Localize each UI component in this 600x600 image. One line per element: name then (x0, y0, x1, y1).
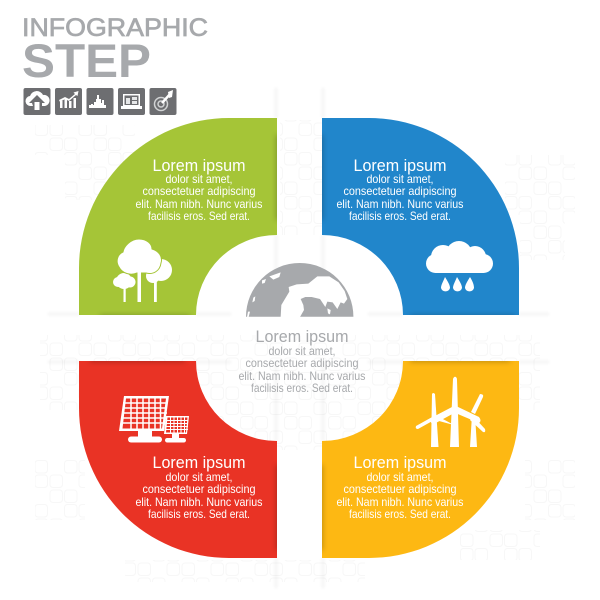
text: blue body: consectetuer adipiscing (344, 184, 456, 198)
panel: yellow quadrant (319, 358, 519, 558)
icon: solar panels (119, 396, 189, 442)
text: yellow body: consectetuer adipiscing (344, 482, 456, 496)
text: red body (136, 470, 262, 521)
icon: globe (246, 263, 353, 317)
panel: green quadrant (79, 118, 280, 319)
title: STEP (22, 34, 151, 87)
text: green body (136, 172, 262, 223)
icon: rain cloud (426, 241, 493, 291)
text: center body: consectetuer adipiscing (246, 356, 358, 370)
band shadows (48, 88, 549, 588)
icon: trees (113, 239, 172, 302)
panel: blue quadrant (319, 118, 519, 319)
text: red body: dolor sit amet, (166, 470, 232, 484)
heading: blue: Lorem ipsum (354, 156, 446, 175)
icon: cloud upload (24, 88, 50, 115)
text: blue body: dolor sit amet, (366, 172, 434, 186)
text: center body: facilisis eros. Sed erat. (251, 381, 353, 395)
text: center body: elit. Nam nibh. Nunc varius (238, 369, 366, 383)
text: blue body: facilisis eros. Sed erat. (349, 209, 451, 223)
icon: wind turbines (416, 377, 485, 447)
icon: growth chart (55, 88, 82, 115)
text: center body: dolor sit amet, (268, 344, 336, 358)
heading: red: Lorem ipsum (152, 453, 246, 472)
text: red body: elit. Nam nibh. Nunc varius (136, 495, 262, 509)
text: green body: facilisis eros. Sed erat. (148, 209, 250, 223)
heading: green: Lorem ipsum (152, 156, 246, 175)
text: green body: consectetuer adipiscing (142, 184, 256, 198)
title: INFOGRAPHIC (22, 14, 208, 42)
text: green body: elit. Nam nibh. Nunc varius (136, 197, 262, 211)
icon: laptop profile (118, 88, 145, 115)
heading: yellow: Lorem ipsum (354, 453, 446, 472)
text: center body (238, 344, 366, 395)
text: blue body: elit. Nam nibh. Nunc varius (336, 197, 464, 211)
text: yellow body: dolor sit amet, (366, 470, 434, 484)
text: yellow body: facilisis eros. Sed erat. (349, 507, 451, 521)
title (22, 14, 208, 87)
heading: center: Lorem ipsum (256, 327, 348, 346)
icon row (24, 88, 176, 115)
text: red body: facilisis eros. Sed erat. (148, 507, 250, 521)
panel: red quadrant (79, 358, 280, 558)
text: red body: consectetuer adipiscing (142, 482, 256, 496)
text: blue body (336, 172, 464, 223)
text: yellow body: elit. Nam nibh. Nunc varius (336, 495, 464, 509)
text: yellow body (336, 470, 464, 521)
icon: bar chart (86, 88, 114, 115)
text: green body: dolor sit amet, (166, 172, 232, 186)
icon: target (150, 88, 176, 115)
